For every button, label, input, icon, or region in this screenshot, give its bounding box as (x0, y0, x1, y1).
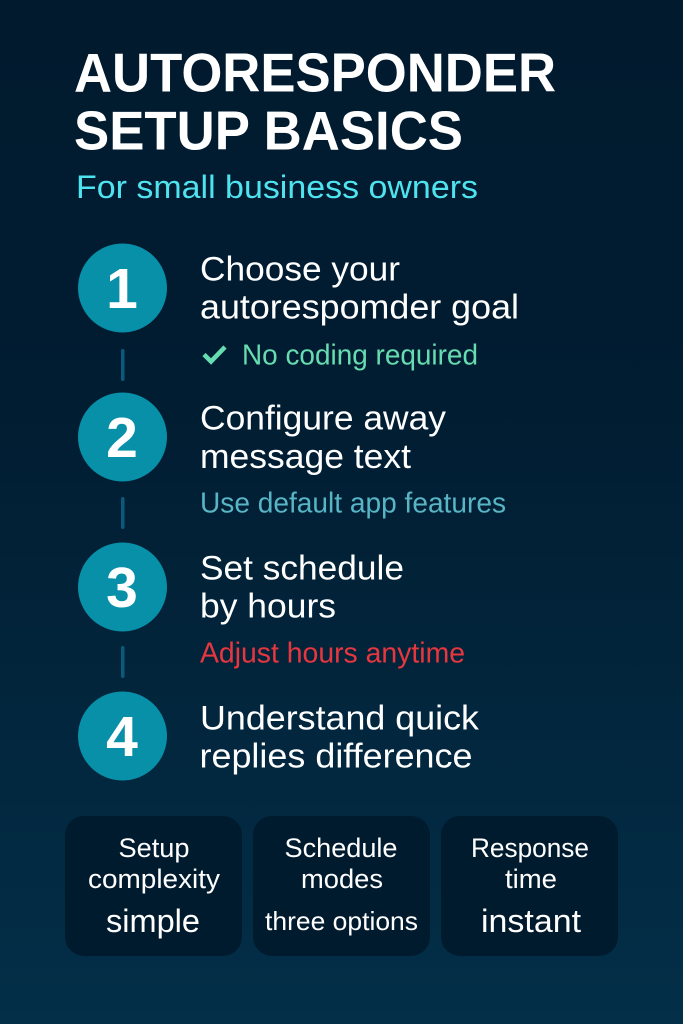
panel: setup complexity: complexity (88, 864, 221, 894)
step 4 badge: 4 (106, 705, 138, 769)
step 3 badge (78, 542, 167, 632)
panel: schedule modes: Schedule (284, 833, 398, 863)
title (74, 42, 556, 162)
connector: step 1 to 2 (121, 349, 124, 381)
step 1 note: No coding required (242, 340, 478, 372)
panel: response time: time (505, 864, 557, 894)
step 1 badge: 1 (106, 257, 138, 321)
panel: schedule modes (253, 816, 430, 956)
panel: response time: Response (471, 833, 589, 863)
panel: schedule modes: three options (265, 906, 418, 936)
subtitle: For small business owners (76, 169, 478, 205)
step 4 heading: Understand quick (200, 700, 480, 738)
step 4 heading: replies difference (200, 738, 472, 776)
step 3 heading: by hours (200, 588, 336, 626)
step 1 heading: Choose your (200, 250, 400, 288)
step 1 (78, 244, 519, 372)
step 3 note: Adjust hours anytime (200, 638, 465, 670)
step 2 badge (78, 392, 167, 482)
title: SETUP BASICS (74, 100, 463, 162)
step 3 heading (200, 550, 404, 626)
panel: schedule modes: modes (301, 864, 383, 894)
step 4 (78, 692, 480, 780)
connector: step 3 to 4 (121, 646, 124, 678)
title: AUTORESPONDER (74, 42, 556, 104)
panel: response time: instant (481, 903, 581, 939)
panel: response time (441, 816, 618, 956)
step 3 heading: Set schedule (200, 550, 404, 588)
step 1 badge (78, 244, 167, 332)
step 4 badge (78, 692, 167, 780)
panel: setup complexity (65, 816, 242, 956)
step 3 badge: 3 (106, 556, 138, 620)
step 2 heading: Configure away (200, 400, 447, 438)
connector: step 2 to 3 (121, 497, 124, 529)
step 3 (78, 542, 465, 670)
step 2 (78, 392, 506, 520)
step 2 badge: 2 (106, 406, 138, 470)
step 1 heading (200, 250, 519, 326)
step 4 heading (200, 700, 480, 776)
panel: setup complexity: simple (106, 903, 200, 939)
panel: setup complexity: Setup (118, 833, 190, 863)
step 2 heading (200, 400, 447, 476)
step 2 heading: message text (200, 438, 411, 476)
step 2 note: Use default app features (200, 488, 506, 520)
icon: check mark (204, 347, 225, 362)
step 1 heading: autorespomder goal (200, 288, 519, 326)
